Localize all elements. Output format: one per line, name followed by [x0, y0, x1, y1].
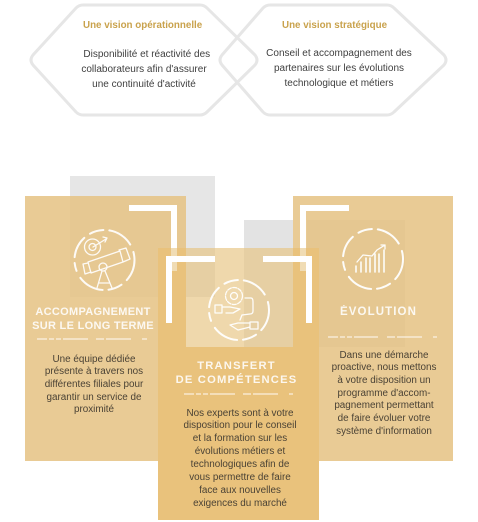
icon: telescope and target — [74, 230, 134, 290]
text: transfert: vous permettre de faire — [189, 472, 291, 483]
hexagon: vision stratégique — [220, 5, 446, 115]
text: accompagnement: garantir un service de — [47, 392, 141, 403]
text: accompagnement: Une équipe dédiée — [53, 354, 135, 365]
text: transfert: exigences du marché — [193, 498, 287, 509]
text: vision opérationnelle — [81, 48, 210, 90]
text: vision opérationnelle: collaborateurs afin d'assurer — [81, 64, 207, 74]
text: accompagnement: présente à travers nos — [45, 366, 143, 377]
icon: hands and gear — [209, 280, 269, 340]
text: transfert: technologiques afin de — [191, 459, 289, 470]
gray square: right — [244, 220, 405, 347]
text: transfert: face aux nouvelles — [199, 485, 281, 496]
title: accompagnement: ACCOMPAGNEMENT — [35, 306, 151, 318]
card panel: évolution — [293, 196, 453, 461]
title: transfert: DE COMPÉTENCES — [176, 374, 297, 386]
text: transfert — [183, 408, 297, 509]
text: vision opérationnelle: Disponibilité et réactivité des — [83, 48, 210, 60]
text: vision stratégique: partenaires sur les évolutions — [274, 62, 404, 74]
heading: vision stratégique: Une vision stratégique — [282, 20, 387, 30]
text: vision stratégique — [266, 48, 412, 88]
divider: right card — [328, 336, 437, 338]
title: transfert — [176, 360, 297, 386]
text: évolution: pagnement permettant — [334, 400, 434, 411]
text: accompagnement: proximité — [74, 404, 114, 415]
hexagon: vision opérationnelle — [31, 5, 257, 115]
text: transfert: évolutions métiers et — [195, 446, 285, 457]
text: accompagnement: différentes filiales pour — [45, 379, 143, 390]
text: évolution: proactive, nous mettons — [332, 362, 436, 373]
text: transfert: et la formation sur les — [193, 433, 287, 444]
text: évolution: Dans une démarche — [340, 350, 428, 361]
text: évolution — [332, 350, 436, 437]
text: transfert: disposition pour le conseil — [183, 420, 297, 431]
text: évolution: à votre disposition un — [337, 375, 431, 386]
card panel: accompagnement — [25, 196, 186, 461]
divider: left card — [37, 338, 147, 340]
icon: rising chart — [343, 229, 403, 289]
text: vision stratégique: Conseil et accompagnement des — [266, 48, 412, 58]
divider: middle card — [184, 393, 293, 395]
gray square: left — [70, 176, 215, 297]
text: évolution: de faire évoluer votre — [338, 413, 430, 424]
text: évolution: programme d'accom- — [338, 388, 430, 399]
text: transfert: Nos experts sont à votre — [186, 408, 294, 418]
card panel: transfert — [158, 248, 319, 520]
text: vision stratégique: technologique et métiers — [285, 78, 393, 88]
heading: vision opérationnelle: Une vision opérationnelle — [83, 20, 202, 30]
white bracket: middle card left — [169, 259, 215, 323]
title: évolution: ÉVOLUTION — [340, 306, 417, 318]
text: évolution: système d'information — [336, 426, 432, 437]
title: transfert: TRANSFERT — [197, 360, 276, 372]
white bracket: middle card right — [263, 259, 309, 323]
white bracket: left card — [129, 208, 174, 248]
text: accompagnement — [45, 354, 144, 415]
title: accompagnement — [32, 306, 154, 332]
title: accompagnement: SUR LE LONG TERME — [32, 320, 154, 332]
white bracket: right card — [303, 208, 349, 248]
text: vision opérationnelle: une continuité d'activité — [92, 78, 196, 90]
